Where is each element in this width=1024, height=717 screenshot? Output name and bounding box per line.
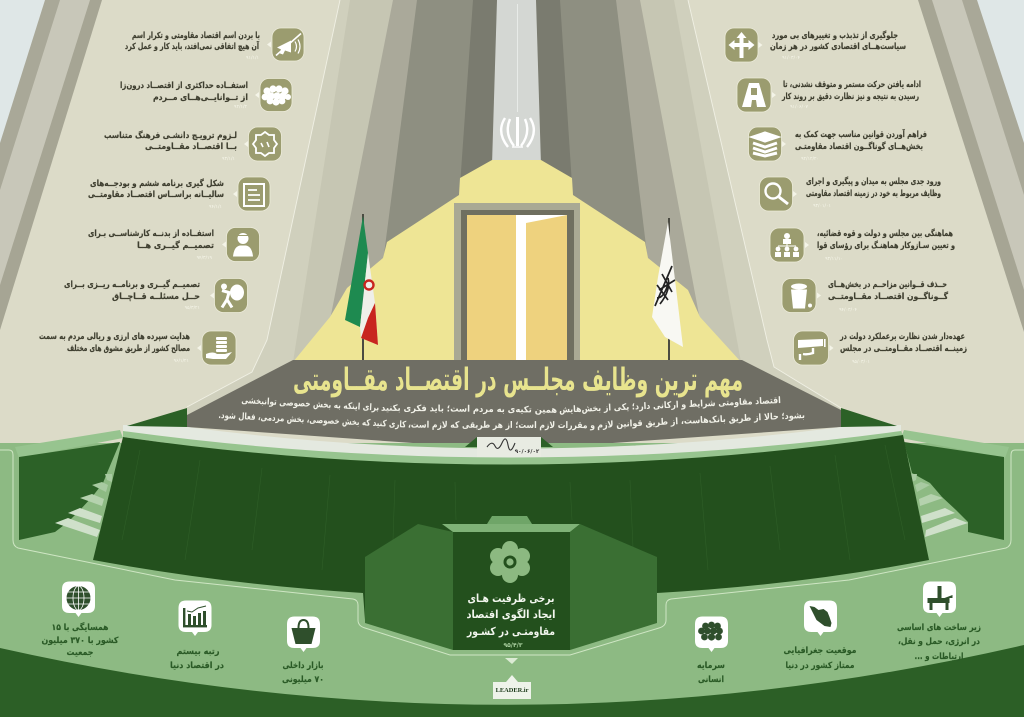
text: item text: و تعیین سـازوکار هماهنـگ برای رؤسای قوا (817, 240, 955, 251)
text: item label: جمعیت (66, 648, 94, 658)
item: domestic market (282, 616, 324, 685)
date stamp: ۹۰/۰۶/۰۲ (515, 449, 540, 455)
text: item label: ۷۰ میلیونی (282, 675, 324, 685)
icon: hand with coins (197, 331, 236, 365)
text: item label: موقعیت جغرافیایی (784, 646, 856, 656)
central tower columns (187, 0, 841, 426)
body text: و مقررات لازم است؛ از هر طریقی که لازم است، (408, 421, 595, 431)
text: item text: ۹۵/۰۳/۰۱ (852, 359, 870, 365)
text: item text: ۹۳/۱/۱ (222, 156, 235, 162)
body text: بشود؛ حالا از طریق بانک‌هاست، از طریق قوانین لازم (597, 411, 805, 431)
item: culture (104, 127, 282, 162)
text: item label: کشور با ۳۷۰ میلیون (41, 636, 119, 646)
text: item text: لـزوم ترویـج دانشـی فرهنگ متناسب (104, 130, 237, 141)
item: budget plan (88, 177, 270, 211)
text: item text: ۹۱/۰۶/۰۷ (790, 104, 809, 110)
text: item label: ارتباطات و ... (914, 652, 964, 662)
bottom dark ground (0, 645, 1024, 717)
text: item text (88, 228, 214, 261)
item: people capacity (120, 78, 292, 112)
text: item text: بــا اقتصــاد مقــاومتــی (145, 141, 237, 152)
text: item label (897, 623, 981, 662)
text: item text (781, 79, 921, 110)
icon: shopping basket (287, 616, 320, 652)
left side building strips (0, 0, 102, 330)
icon: thief with sack (210, 278, 248, 312)
right side building strips (918, 0, 1024, 332)
item: neighbours (41, 582, 119, 658)
text: item text: ۹۲/۱۲/۲۰ (801, 156, 819, 162)
text: item text: جلوگیری از تذبذب و تغییرهای بی مورد (772, 30, 898, 41)
text: item text: فراهم آوردن قوانین مناسب جهت کمک به (795, 128, 927, 140)
text: item text: عهده‌دار شدن نظارت برعملکرد دولت در (839, 331, 965, 342)
item: continuous (737, 78, 921, 112)
icon: national emblem (501, 117, 534, 147)
logo: LEADER.ir (493, 675, 531, 699)
left dark triangle (127, 408, 187, 427)
text: item text (104, 130, 237, 162)
center heading: ایجاد الگوی اقتصاد (466, 608, 556, 621)
text: item text: ۹۳/۱۱/۱۰ (825, 256, 843, 262)
text: item text (795, 128, 927, 162)
center lectern (365, 516, 657, 650)
text: item text: تصمیــم گیــری و برنامــه ریــزی بــرای (64, 279, 200, 290)
text: item text: ۹۳/۰۱/۰۱ (813, 203, 831, 209)
floor guide line (0, 450, 1024, 655)
text: item text: استفــاده حداکثری از اقتصــاد درون‌زا (120, 80, 248, 91)
icon: magnifier (760, 177, 797, 211)
icon: Iran map (804, 600, 837, 636)
item: rank (170, 600, 225, 671)
item: infrastructure (897, 582, 981, 662)
text: item text: ادامه یافتن حرکت مستمر و متوقف نشدنی، تا (783, 79, 921, 90)
text: item label (697, 661, 725, 685)
body text: کاری کنید که بخش خصوصی، بخش مردمی، فعال شود. (218, 411, 407, 431)
item: experts (88, 228, 260, 262)
panel: right list (725, 28, 967, 365)
body text (218, 396, 805, 431)
item: geography (784, 600, 856, 671)
text: item text: ۹۲/۱/۲ (234, 104, 248, 110)
text: item text: ورود جدی مجلس به میدان و پیگیری و اجرای (806, 176, 941, 187)
background wall (0, 0, 1024, 460)
text: item text: ۹۵/۳/۲۱ (185, 305, 200, 311)
main dark green wall (93, 435, 929, 620)
text: item text (839, 331, 967, 365)
green ledge (123, 430, 903, 465)
text: item text: از تــوانایــی‌هــای مــردم (153, 92, 248, 103)
item: serious entry (760, 176, 941, 211)
right dark triangle (841, 408, 897, 427)
text: item label: سرمایه (697, 661, 725, 671)
item: savings (39, 331, 236, 365)
panel: left list (39, 28, 304, 365)
text: item label: در اقتصاد دنیا (170, 661, 225, 671)
panel: bottom capacities (41, 582, 981, 685)
right wall trim (901, 430, 1009, 458)
item: stable policy (725, 28, 906, 62)
decorative lines (187, 0, 841, 408)
icon: stacked books (748, 127, 786, 161)
text: item text: گــوناگــون اقتصــاد مقــاومتــی (828, 291, 948, 302)
text: item text (828, 279, 948, 313)
icon: org chart (770, 228, 809, 262)
text: item text: ۹۴/۰۳/۰۴ (839, 307, 858, 313)
text: item text: زمینــه اقتصــاد مقــاومتــی در مجلس (840, 343, 967, 354)
icon: worker (222, 228, 260, 262)
white ledge (123, 425, 901, 458)
grey bench (187, 360, 841, 450)
text: item label: همسایگی با ۱۵ (51, 622, 109, 633)
item: oversight (794, 331, 967, 365)
icon: crowd (255, 78, 292, 112)
triangle marker (505, 658, 518, 664)
right steps (911, 474, 968, 537)
flag: Iran (345, 214, 378, 368)
left wall trim (15, 430, 123, 458)
text: item text: با بردن اسم اقتصاد مقاومتی و تکرار اسم (132, 30, 260, 41)
text: item label (282, 661, 324, 685)
text: item text: ۹۶/۱/۲۱ (174, 358, 189, 364)
text: item label: بازار داخلی (282, 661, 324, 671)
text: item text (125, 30, 260, 61)
text: item text (39, 331, 190, 364)
item: human capital (695, 616, 728, 685)
date stamp (465, 437, 553, 457)
text: item text: تصمیــم گیــری هــا (137, 240, 214, 251)
icon: crossroad arrows (725, 28, 762, 62)
text: item text: هماهنگی بین مجلس و دولت و قوه قضائیه، (817, 228, 953, 239)
icon: oil rig (923, 582, 956, 617)
flag: white calligraphy (652, 218, 683, 368)
center heading: مقاومتـی در کشـور (466, 625, 555, 638)
left steps (55, 474, 112, 537)
text: item text: حــذف قــوانین مزاحــم در بخش‌هــای (828, 279, 947, 290)
body text: همین تکیه‌ی به مردم است؛ باید فکری بکنید (381, 404, 557, 416)
icon: security camera (794, 331, 834, 365)
icon: star badge (244, 127, 282, 161)
icon: chart (178, 600, 212, 636)
item: coordination (770, 228, 955, 262)
text: item label: رتبه بیستم (176, 647, 220, 657)
title: مهم ترین وظایف مجلــس در اقتصــاد مقــاومتی (293, 362, 743, 398)
text: item text: شکل گیری برنامه ششم و بودجــه‌های (90, 178, 224, 189)
text: item text (806, 176, 941, 209)
icon: road (737, 78, 776, 112)
text: item text (817, 228, 955, 262)
door (454, 203, 580, 361)
body text: برای اینکه به بخش خصوصی توانبخشی (241, 396, 379, 413)
item: remove laws (782, 278, 948, 313)
icon: crowd (695, 616, 728, 652)
text: item text: ۹۱/۱/۱ (246, 55, 259, 61)
item: smuggling (64, 278, 248, 312)
text: item text: سالیــانه براســاس اقتصــاد مقاومتــی (88, 189, 224, 200)
text: item text: وظایف مربوط به خود در زمینه اقتصاد مقاومتی (806, 188, 941, 199)
beige lower edge right (841, 400, 1024, 442)
text: item text: حــل مسئلــه قــاچــاق (112, 291, 200, 302)
item: laws (748, 127, 927, 162)
icon: trash bin (782, 278, 821, 312)
left wall (19, 442, 120, 540)
text: item text: مصالح کشور از طریق مشوق های مختلف (67, 343, 190, 354)
text: item text (770, 30, 906, 61)
text: item text: بخش‌هــای گوناگــون اقتصاد مقاومتـی (795, 141, 923, 152)
text: item text: ۹۴/۱/۱ (209, 204, 222, 210)
text: item text (64, 279, 200, 311)
text: item label: در انرژی، حمل و نقل، (898, 637, 981, 647)
icon: flower emblem (490, 541, 530, 583)
icon: notepad (233, 177, 270, 211)
text: item label (170, 647, 225, 671)
text: item text (120, 80, 248, 110)
icon: globe (62, 582, 95, 617)
text: item text: ۹۱/۰۳/۰۴ (782, 55, 801, 61)
text: item label (784, 646, 856, 671)
item: no slogans (125, 28, 304, 61)
center heading: ۹۵/۴/۳ (503, 642, 523, 649)
text: item label: زیر ساخت های اساسی (897, 623, 981, 633)
logo: LEADER.ir: LEADER.ir (496, 687, 529, 694)
beige lower edge left (0, 400, 187, 442)
body text: اقتصاد مقاومتی شرایط و ارکانی دارد؛ یکی از بخش‌هایش (559, 396, 781, 416)
text: item label: انسانی (698, 675, 724, 685)
text: item text: استفــاده از بدنــه کارشناســی بـرای (88, 228, 214, 239)
right wall (904, 442, 1004, 540)
center heading: برخی ظرفیت هـای (468, 592, 554, 605)
text: item text: آن هیچ اتفاقی نمی‌افتد، باید کار و عمل کرد (125, 40, 260, 52)
text: item label (41, 622, 119, 658)
text: item text: سیاست‌هــای اقتصادی کشور در هر زمان (770, 41, 906, 52)
text: item text: رسیدن به نتیجه و نیز نظارت دقیق بر روند کار (781, 91, 919, 102)
text: item text: ۹۴/۳/۱۹ (197, 255, 213, 261)
text: item text (88, 178, 224, 210)
yellow facade (293, 160, 741, 362)
center heading (466, 592, 556, 649)
text: item text: هدایت سپرده های ارزی و ریالی مردم به سمت (39, 331, 190, 342)
icon: muted speaker (267, 28, 304, 61)
text: item label: ممتاز کشور در دنیا (786, 661, 854, 671)
green floor (0, 443, 1024, 717)
